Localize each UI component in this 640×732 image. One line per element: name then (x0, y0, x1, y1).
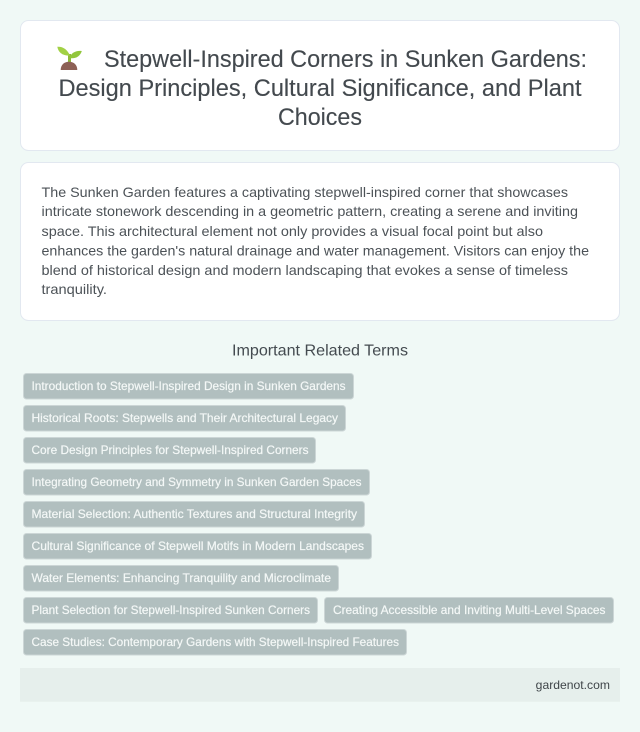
icon: seedling (57, 47, 82, 70)
tag: water elements: Water Elements: Enhancing Tranquility and Microclimate (32, 571, 331, 585)
title text: Choices (278, 104, 362, 131)
tag list (24, 374, 614, 655)
description panel (20, 162, 620, 320)
tag: core principles: Core Design Principles for Stepwell-Inspired Corners (32, 443, 308, 457)
tag: case studies: Case Studies: Contemporary Gardens with Stepwell-Inspired Features (32, 635, 399, 649)
footer (20, 668, 620, 702)
title text: Design Principles, Cultural Significance, and Plant (58, 75, 582, 102)
tag: cultural significance (24, 534, 372, 559)
tag: core principles (24, 438, 316, 463)
title panel (20, 20, 620, 150)
tag: introduction (24, 374, 354, 399)
tag: material selection (24, 502, 364, 527)
tag: material selection: Material Selection: Authentic Textures and Structural Integrity (32, 507, 357, 521)
tag: geometry (24, 470, 370, 495)
tag: water elements (24, 566, 338, 591)
tag: plant selection (24, 598, 318, 623)
footer source text: gardenot.com (536, 678, 610, 692)
tag: historical roots: Historical Roots: Stepwells and Their Architectural Legacy (32, 411, 338, 425)
tag: cultural significance: Cultural Significance of Stepwell Motifs in Modern Landscapes (32, 539, 364, 553)
description text: intricate stonework descending in a geometric pattern, creating a serene and inviting (42, 203, 578, 219)
tag: accessible spaces: Creating Accessible and Inviting Multi-Level Spaces (333, 603, 606, 617)
tag: accessible spaces (324, 598, 614, 623)
description text (42, 184, 589, 297)
description text: The Sunken Garden features a captivating stepwell-inspired corner that showcases (42, 184, 568, 200)
description text: space. This architectural element not only provides a visual focal point but also (42, 223, 543, 239)
description text: tranquility. (42, 281, 107, 297)
tag: historical roots (24, 406, 346, 431)
description text: enhances the garden's natural drainage and water management. Visitors can enjoy the (42, 242, 589, 258)
tag: plant selection: Plant Selection for Stepwell-Inspired Sunken Corners (32, 603, 310, 617)
heading: related terms: Important Related Terms (232, 342, 408, 360)
tag: geometry: Integrating Geometry and Symmetry in Sunken Garden Spaces (32, 475, 362, 489)
description text: blend of historical design and modern landscaping that evokes a sense of timeless (42, 262, 568, 278)
tag: introduction: Introduction to Stepwell-Inspired Design in Sunken Gardens (32, 379, 346, 393)
title text (58, 46, 587, 131)
tag: case studies (24, 630, 406, 655)
title text: Stepwell-Inspired Corners in Sunken Gardens: (104, 46, 587, 73)
